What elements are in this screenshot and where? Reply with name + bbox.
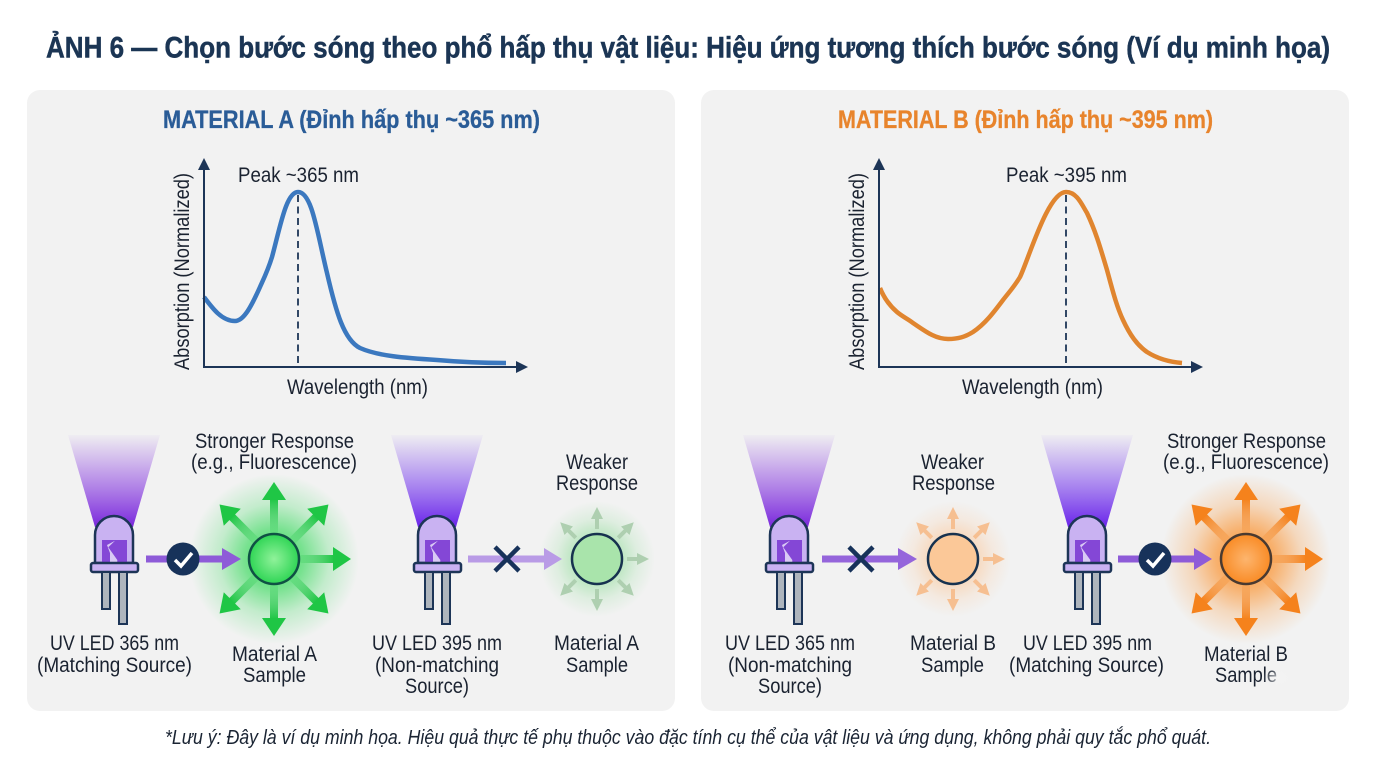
label: material A sample, non-matching — [554, 632, 639, 677]
chart: absorption spectrum B: Peak ~395 nm — [1006, 164, 1127, 187]
label: material B sample, non-matching: Sample — [921, 654, 984, 677]
label: material A sample — [232, 643, 317, 687]
label: weaker response B: Weaker — [921, 451, 984, 474]
icon: weak green response — [539, 501, 655, 617]
label: material B sample — [1204, 643, 1294, 689]
label: weaker response A — [556, 451, 638, 495]
arrow: matching check, panel B — [1118, 542, 1212, 576]
heading: material B: MATERIAL B (Đỉnh hấp thụ ~395 nm) — [838, 106, 1213, 134]
label: stronger response B: Stronger Response — [1167, 430, 1326, 453]
label: material B sample, non-matching: Material B — [910, 632, 996, 655]
icon: strong green response — [189, 474, 359, 644]
label: UV LED 395 nm matching — [1009, 632, 1164, 677]
icon: UV LED 365 nm with beam, panel B — [743, 435, 835, 624]
label: material B sample, non-matching — [910, 632, 996, 677]
footnote: *Lưu ý: Đây là ví dụ minh họa. Hiệu quả thực tế phụ thuộc vào đặc tính cụ thể của vật liệu và ứng dụng, không phải quy tắc phổ quát. — [165, 726, 1211, 749]
label: weaker response B — [912, 451, 995, 495]
label: material A sample, non-matching: Material A — [554, 632, 639, 655]
label: UV LED 395 nm non-matching: (Non-matching — [375, 654, 499, 677]
arrow: non-matching cross — [468, 547, 562, 571]
label: UV LED 365 nm non-matching — [725, 632, 855, 698]
panel: material A — [27, 90, 675, 711]
icon: strong orange response — [1161, 474, 1331, 644]
label: UV LED 365 nm non-matching: UV LED 365 nm — [725, 632, 855, 655]
label: weaker response A: Response — [556, 472, 638, 495]
label: UV LED 395 nm matching: UV LED 395 nm — [1023, 632, 1152, 655]
chart: absorption spectrum A: Wavelength (nm) — [287, 376, 428, 399]
label: stronger response A: Stronger Response — [195, 430, 354, 453]
label: UV LED 365 nm — [37, 632, 192, 677]
label: weaker response A: Weaker — [566, 451, 628, 474]
label: UV LED 365 nm: (Matching Source) — [37, 654, 192, 677]
label: weaker response B: Response — [912, 472, 995, 495]
label: material B sample: Sample — [1215, 664, 1277, 687]
icon: UV LED 365 nm with beam — [68, 435, 160, 624]
label: UV LED 395 nm matching: (Matching Source) — [1009, 654, 1164, 677]
heading: material A: MATERIAL A (Đỉnh hấp thụ ~365 nm) — [163, 106, 540, 134]
arrow: matching check — [146, 542, 241, 576]
label: material A sample, non-matching: Sample — [566, 654, 628, 677]
icon: UV LED 395 nm with beam — [391, 435, 483, 624]
label: UV LED 395 nm non-matching — [372, 632, 502, 698]
label: stronger response B: (e.g., Fluorescence) — [1163, 451, 1329, 474]
label: material A sample: Sample — [243, 664, 306, 687]
label: material B sample: Material B — [1204, 643, 1288, 666]
label: stronger response A — [191, 430, 357, 474]
label: UV LED 395 nm non-matching: Source) — [405, 675, 469, 698]
chart: absorption spectrum A: Absorption (Normalized) — [171, 173, 194, 370]
label: stronger response B — [1163, 430, 1329, 474]
label: UV LED 365 nm non-matching: (Non-matching — [728, 654, 852, 677]
chart: absorption spectrum B — [846, 158, 1203, 399]
icon: UV LED 395 nm with beam, panel B — [1041, 435, 1133, 624]
label: UV LED 365 nm non-matching: Source) — [758, 675, 822, 698]
arrow: non-matching cross, panel B — [822, 547, 917, 571]
label: UV LED 395 nm non-matching: UV LED 395 nm — [372, 632, 502, 655]
label: material A sample: Material A — [232, 643, 317, 666]
chart: absorption spectrum B: Wavelength (nm) — [962, 376, 1103, 399]
chart: absorption spectrum A — [171, 158, 528, 399]
panel: material B — [701, 90, 1349, 711]
chart: absorption spectrum A: Peak ~365 nm — [238, 164, 359, 187]
icon: weak orange response — [895, 501, 1011, 617]
label: stronger response A: (e.g., Fluorescence) — [191, 451, 357, 474]
label: UV LED 365 nm: UV LED 365 nm — [50, 632, 179, 655]
chart: absorption spectrum B: Absorption (Normalized) — [846, 173, 869, 370]
